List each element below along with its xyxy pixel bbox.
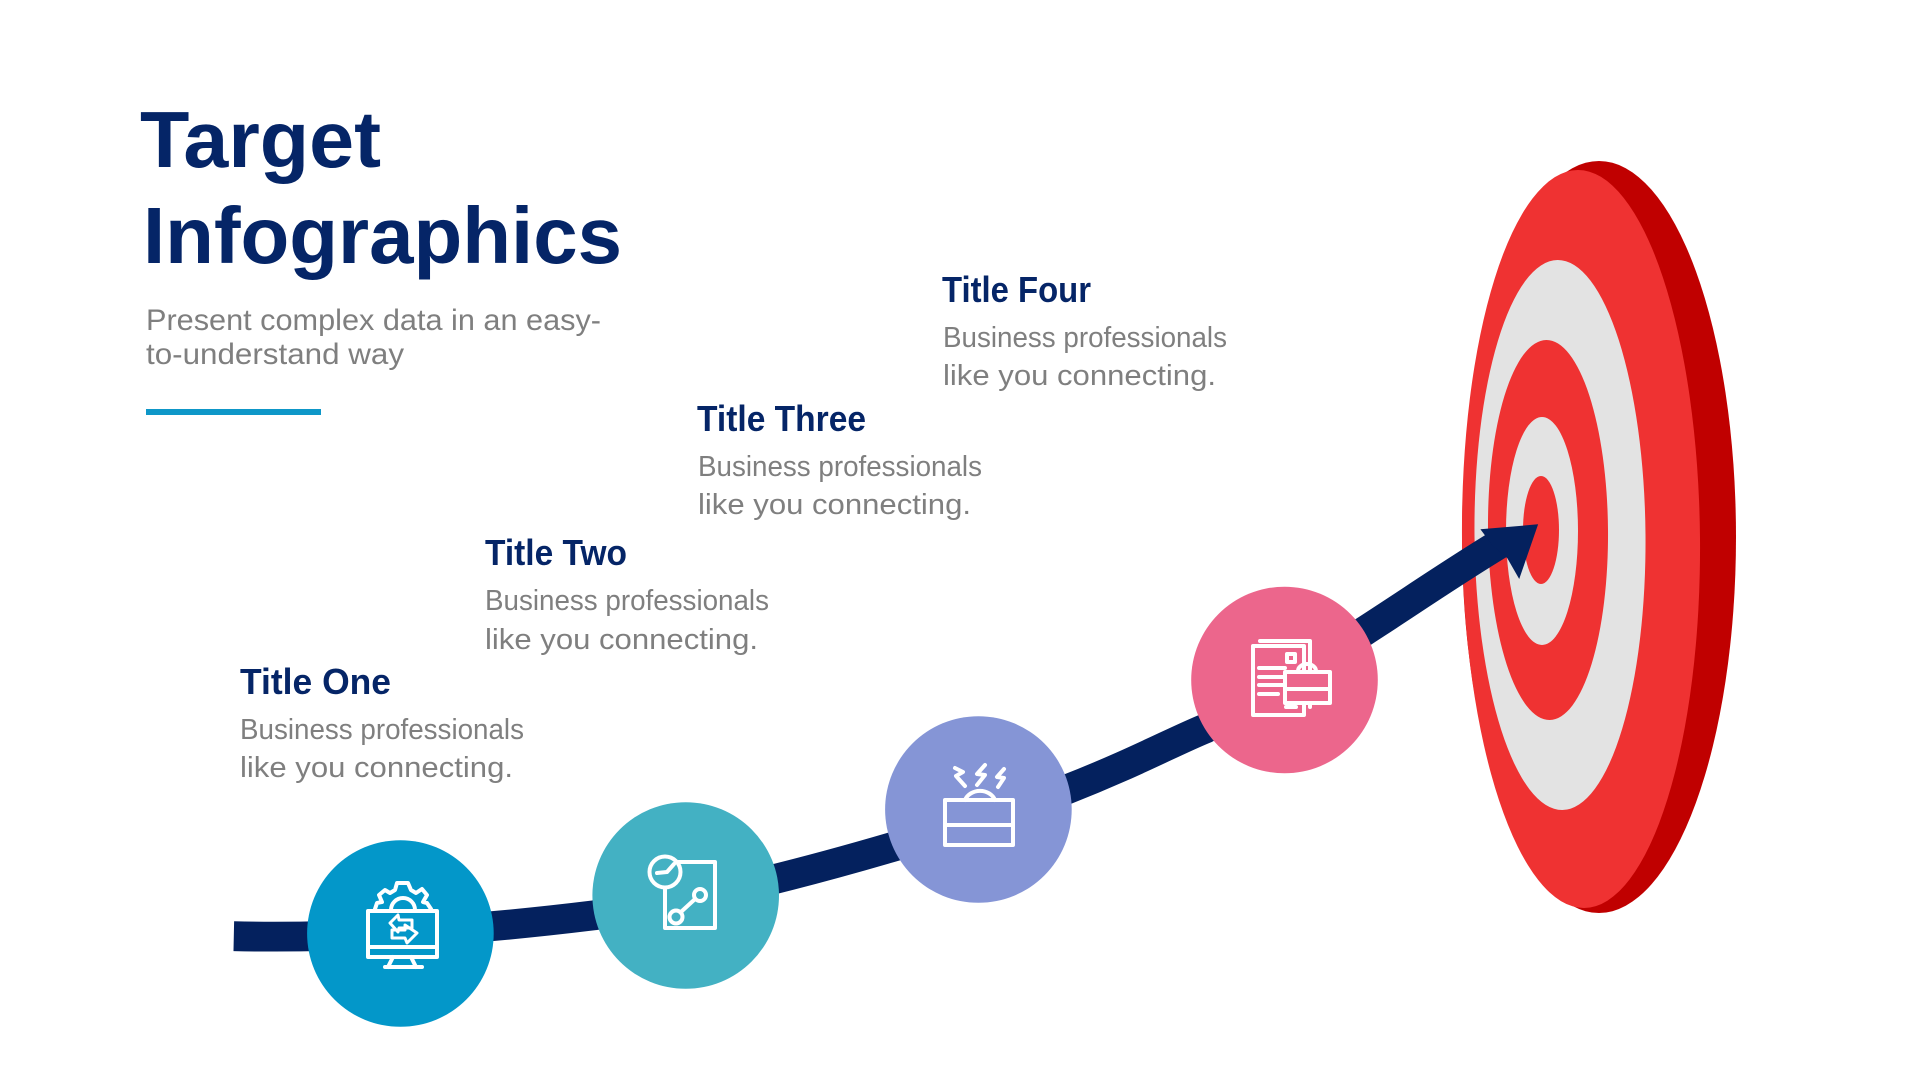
icon: briefcase with bolts xyxy=(945,765,1013,845)
text block: title three: like you connecting. xyxy=(698,489,971,521)
text block: title four: Business professionals xyxy=(943,322,1227,354)
arrow head xyxy=(1480,524,1538,579)
text block: title four: Title Four xyxy=(942,269,1091,310)
target inner white ring xyxy=(1506,417,1578,645)
step three: marker xyxy=(885,716,1072,903)
text block: title three: Title Three xyxy=(697,398,866,439)
title: Infographics xyxy=(143,191,622,280)
icon: monitor with gear xyxy=(368,883,437,967)
step two: marker xyxy=(592,802,779,989)
icon: document with clock xyxy=(650,856,715,928)
text block: title one: Business professionals xyxy=(240,714,524,746)
target xyxy=(1459,161,1736,913)
step four: marker xyxy=(1191,587,1378,773)
subtitle: Present complex data in an easy- xyxy=(146,304,601,337)
text block: title two: Title Two xyxy=(485,532,627,573)
text block: title two xyxy=(485,532,769,656)
target bullseye xyxy=(1523,476,1559,584)
text block: title four xyxy=(942,269,1227,392)
subtitle xyxy=(146,304,601,371)
text block: title four: like you connecting. xyxy=(943,360,1216,392)
text block: title one: like you connecting. xyxy=(240,752,513,784)
arrow path xyxy=(234,524,1538,937)
text block: title three: Business professionals xyxy=(698,451,982,483)
target red ring xyxy=(1486,339,1610,721)
target outer ring xyxy=(1459,169,1703,909)
text block: title two: Business professionals xyxy=(485,585,769,617)
title xyxy=(140,95,622,280)
icon: documents with case xyxy=(1253,641,1330,715)
step one: marker xyxy=(307,840,494,1027)
text block: title one: Title One xyxy=(240,661,391,702)
text block: title one xyxy=(240,661,524,784)
subtitle: to-understand way xyxy=(146,338,404,371)
target white ring xyxy=(1472,259,1648,811)
target side xyxy=(1462,161,1736,913)
text block: title three xyxy=(697,398,982,521)
text block: title two: like you connecting. xyxy=(485,624,758,656)
accent line xyxy=(146,409,321,415)
title: Target xyxy=(140,95,381,184)
